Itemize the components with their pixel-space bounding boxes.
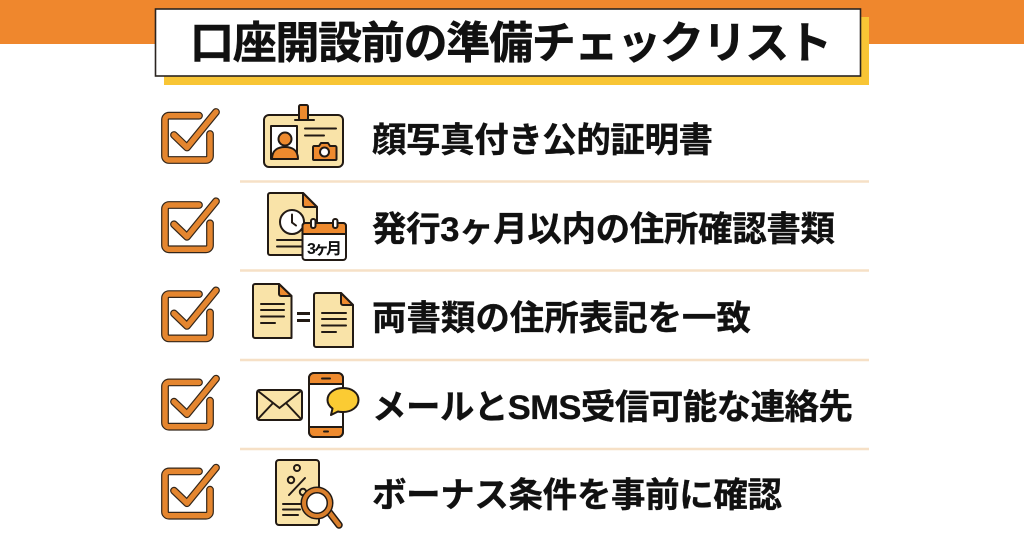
- label 3: 両書類の住所表記を一致: [372, 300, 751, 338]
- icon: document with clock and calendar: [268, 193, 346, 260]
- checkbox 3: [165, 290, 216, 338]
- checkbox 4: [165, 379, 216, 427]
- dividers: [240, 182, 869, 449]
- row 4: email and SMS: [165, 373, 853, 437]
- label 1: 顔写真付き公的証明書: [372, 122, 713, 160]
- label 5: ボーナス条件を事前に確認: [372, 477, 782, 515]
- title box: [156, 9, 869, 85]
- icon: document with percent and magnifier: [276, 460, 339, 525]
- row 1: photo ID: [165, 105, 713, 167]
- header band: [0, 0, 1024, 44]
- label 2: 発行3ヶ月以内の住所確認書類: [372, 211, 835, 249]
- calendar label: 3ヶ月: [307, 241, 342, 258]
- checkbox 2: [165, 201, 216, 249]
- row 2: proof of address within 3 months: [165, 193, 835, 260]
- icon: two equal documents: [253, 284, 353, 347]
- label 4: メールとSMS受信可能な連絡先: [372, 389, 853, 427]
- checkbox 5: [165, 468, 216, 516]
- icon: smartphone with speech bubble: [309, 373, 358, 437]
- icon: ID card: [264, 105, 343, 167]
- row 3: matching addresses: [165, 284, 751, 347]
- title text: 口座開設前の準備チェックリスト: [190, 19, 832, 68]
- checkbox 1: [165, 112, 216, 160]
- icon: envelope: [257, 390, 302, 420]
- row 5: bonus conditions: [165, 460, 782, 525]
